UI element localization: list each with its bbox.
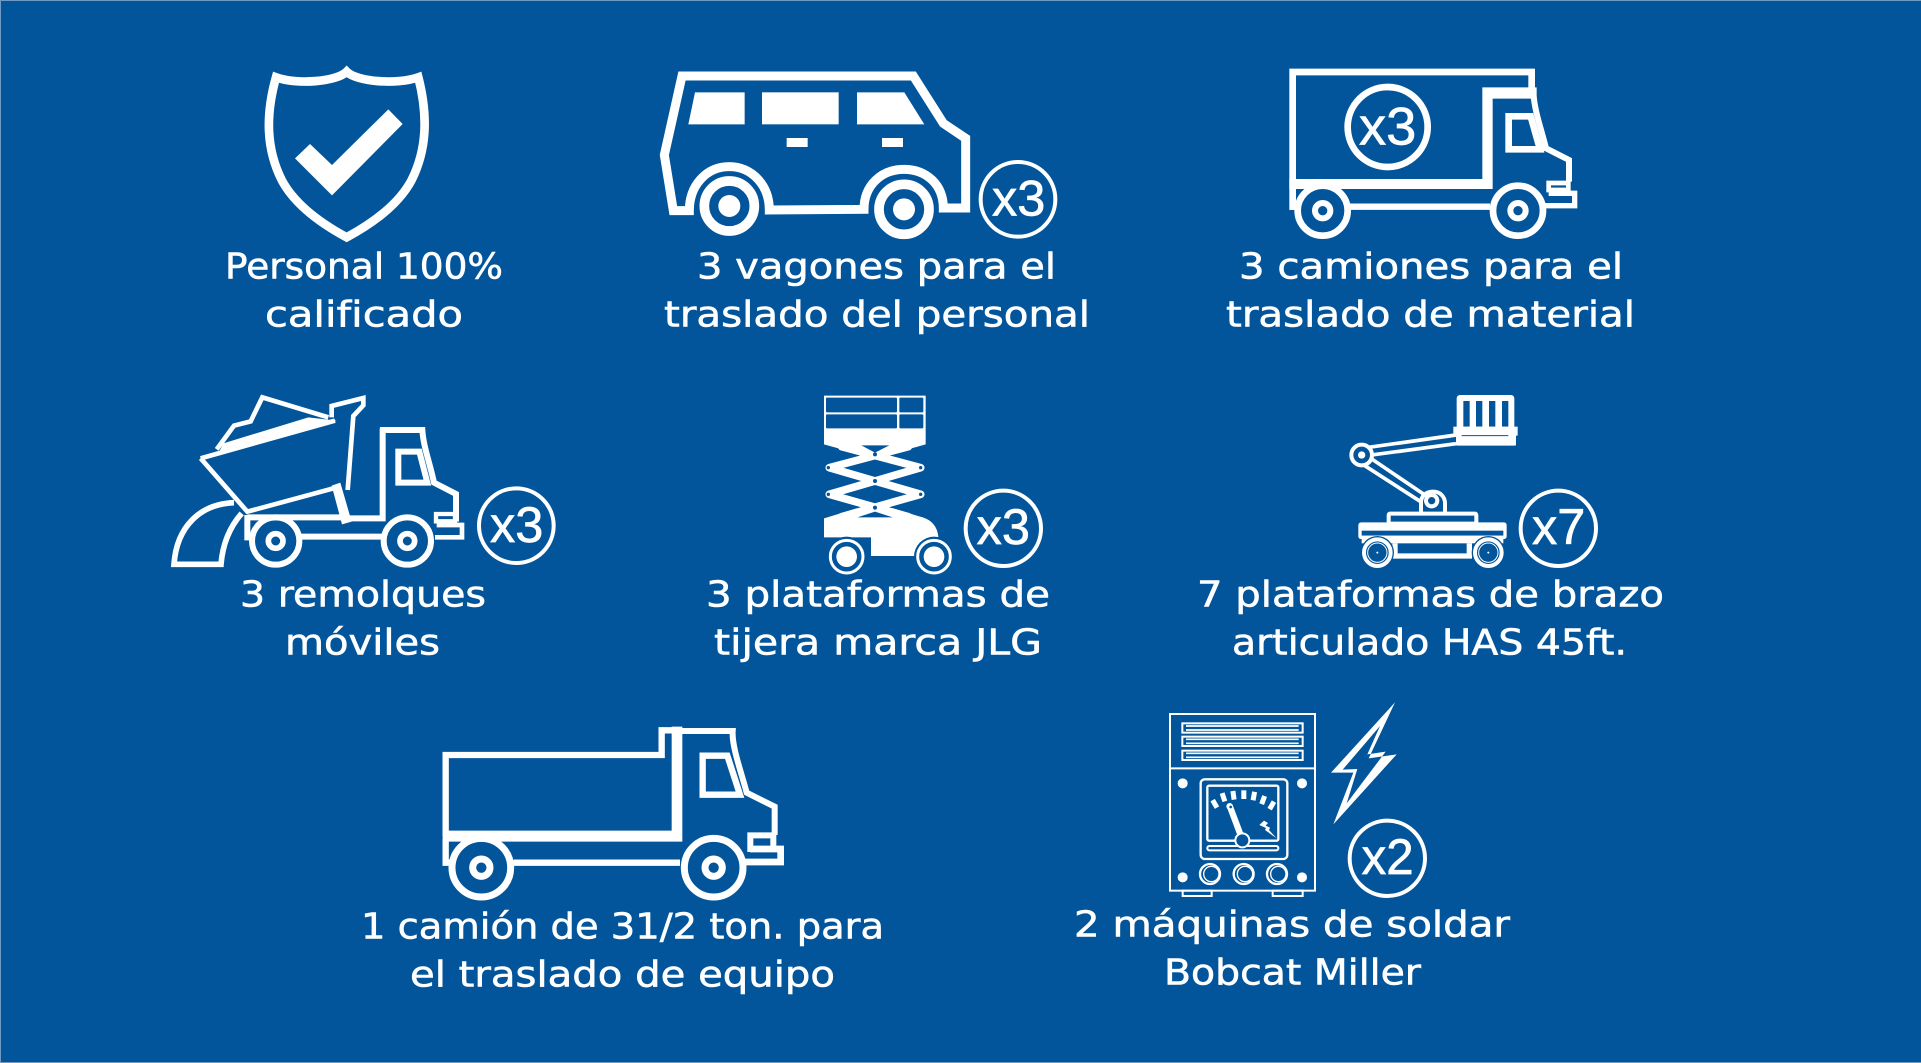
heading: maquinas de soldar: [1074, 905, 1510, 994]
icon: van with x3 badge: [664, 76, 1055, 237]
panel: plataformas de brazo: [1197, 395, 1664, 664]
heading: maquinas de soldar: 2 máquinas de soldar: [1074, 905, 1510, 946]
icon: box truck with x3 badge: x3: [1359, 97, 1416, 156]
icon: box truck with x3 badge: [1289, 72, 1575, 236]
heading: camion de 3 1/2 ton: [361, 907, 884, 996]
heading: plataformas de brazo articulado: 7 plataformas de brazo: [1197, 575, 1664, 616]
panel: remolques: [174, 397, 554, 664]
heading: camiones para material: 3 camiones para el: [1239, 247, 1623, 288]
icon: dump truck with x3 badge: x3: [490, 497, 543, 553]
heading: plataformas de tijera JLG: tijera marca JLG: [714, 623, 1042, 664]
heading: remolques moviles: 3 remolques: [240, 575, 486, 616]
icon: welding machine with bolt and x2 badge: x2: [1362, 829, 1414, 885]
panel: vagones: [664, 76, 1090, 336]
heading: vagones para el personal: 3 vagones para el: [697, 247, 1056, 288]
icon: boom lift with x7 badge: x7: [1532, 499, 1585, 555]
icon: scissor lift with x3 badge: [824, 396, 1041, 577]
panel: maquinas de soldar: [1074, 702, 1510, 994]
heading: personal 100% calificado: calificado: [265, 295, 463, 336]
heading: plataformas de tijera JLG: 3 plataformas de: [706, 575, 1050, 616]
icon: shield with check: [269, 72, 425, 237]
heading: personal 100% calificado: Personal 100%: [225, 247, 503, 288]
heading: plataformas de brazo articulado: articulado HAS 45ft.: [1232, 623, 1627, 664]
heading: vagones para el personal: [664, 247, 1090, 336]
heading: remolques moviles: móviles: [285, 623, 440, 664]
icon: scissor lift with x3 badge: x3: [977, 499, 1030, 555]
heading: personal 100% calificado: [225, 247, 503, 336]
icon: van with x3 badge: x3: [992, 170, 1045, 226]
heading: remolques moviles: [240, 575, 486, 664]
heading: plataformas de tijera JLG: [706, 575, 1050, 664]
heading: camion de 3 1/2 ton: 1 camión de 31/2 ton. para: [361, 907, 884, 948]
heading: camiones para material: traslado de material: [1226, 295, 1635, 336]
panel: personal calificado: [225, 72, 503, 336]
heading: plataformas de brazo articulado: [1197, 575, 1664, 664]
heading: camiones para material: [1226, 247, 1635, 336]
heading: maquinas de soldar: Bobcat Miller: [1164, 953, 1421, 994]
panel: camiones de material: [1226, 72, 1635, 336]
icon: dump-body truck: [443, 727, 781, 897]
panel: camion de equipo: [361, 727, 884, 996]
heading: camion de 3 1/2 ton: el traslado de equipo: [410, 955, 835, 996]
icon: dump truck with x3 badge: [174, 397, 554, 565]
icon: boom lift with x7 badge: [1351, 395, 1596, 569]
heading: vagones para el personal: traslado del personal: [664, 295, 1090, 336]
icon: welding machine with bolt and x2 badge: [1170, 702, 1425, 896]
panel: plataformas de tijera: [706, 396, 1050, 664]
